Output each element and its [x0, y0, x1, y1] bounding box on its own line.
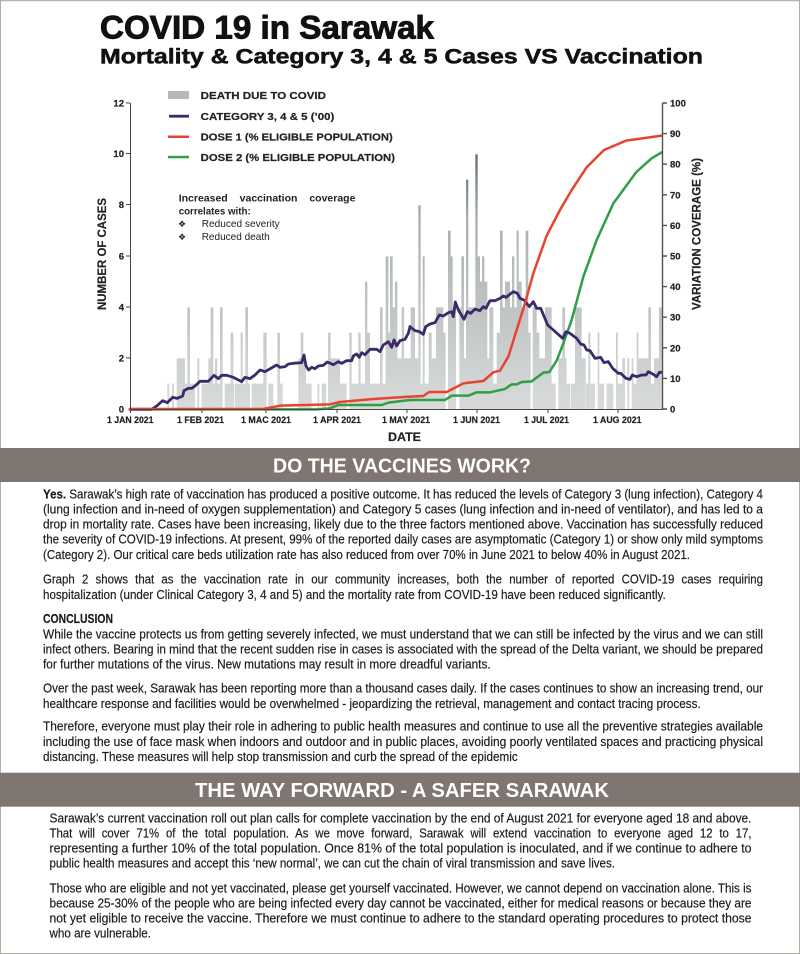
- title: COVID 19 in Sarawak: [100, 10, 434, 46]
- left axis: 8: [119, 200, 124, 211]
- line: category 3, 4 and 5: [130, 292, 662, 409]
- left axis: 0: [119, 404, 124, 416]
- y axis title: variation coverage: VARIATION COVERAGE (%): [690, 158, 704, 310]
- x axis: 1 MAY 2021: [382, 415, 431, 426]
- left axis: 4: [119, 302, 125, 314]
- right axis: 100: [670, 98, 686, 110]
- right axis: 40: [670, 282, 681, 293]
- x axis: 1 APR 2021: [313, 415, 362, 426]
- text block: yes paragraph: drop in mortality rate. Cases have been increasing, likely due to the three factors mentioned above. Vaccination has successfully reduced: [43, 518, 763, 532]
- line: dose 1: [130, 136, 662, 409]
- y axis title: number of cases: NUMBER OF CASES: [95, 198, 109, 310]
- right axis: 80: [670, 160, 681, 171]
- right axis: 70: [670, 190, 681, 201]
- left axis: 12: [113, 98, 124, 110]
- annotation: vaccination correlation: Reduced death: [202, 231, 270, 243]
- legend: DOSE 1 (% ELIGIBLE POPULATION): [201, 132, 393, 144]
- annotation: vaccination correlation: Increased vaccination coverage: [179, 192, 356, 204]
- left axis: 6: [119, 252, 124, 262]
- legend: [168, 91, 395, 164]
- text block: eligible people: because 25-30% of the people who are being infected every day cannot be vaccinated, either for medical reasons or because they are: [50, 896, 752, 910]
- x axis: [107, 409, 663, 426]
- text block: eligible people: Those who are eligible and not yet vaccinated, please get yourself vaccinated. However, we cannot depend on vaccination alone. This is: [50, 881, 752, 895]
- annotation: vaccination correlation: ❖: [178, 220, 186, 230]
- left axis: 10: [113, 149, 124, 160]
- x axis title: date: DATE: [388, 430, 421, 444]
- section heading: do the vaccines work: DO THE VACCINES WORK?: [273, 456, 531, 478]
- section heading: the way forward: THE WAY FORWARD - A SAFER SARAWAK: [195, 780, 610, 802]
- bars: death due to covid: [167, 154, 662, 409]
- text block: conclusion paragraph 2: Over the past week, Sarawak has been reporting more than a thousand cases daily. If the cases continues to show an increasing trend, our: [43, 682, 763, 696]
- text block: yes paragraph: (Category 2). Our critical care beds utilization rate has also reduced from over 70% in June 2021 to below 40% in August 2021.: [43, 548, 690, 562]
- section heading: do the vaccines work: [0, 448, 800, 482]
- text block: roll out plan: representing a further 10% of the total population. Once 81% of the total population is inoculated, and if we continue to adhere to: [50, 841, 752, 855]
- left axis: 2: [119, 354, 124, 364]
- text block: conclusion paragraph 2: [43, 682, 763, 711]
- chart: mortality, category cases and vaccination: [95, 91, 704, 444]
- section heading: the way forward: [0, 773, 800, 807]
- text block: conclusion paragraph 3: including the use of face mask when indoors and outdoor and in public places, avoiding poorly ventilated spaces and practicing physical: [43, 735, 763, 749]
- legend: DOSE 2 (% ELIGIBLE POPULATION): [201, 153, 395, 164]
- right axis: 50: [670, 252, 681, 262]
- x axis: 1 MAC 2021: [241, 415, 292, 426]
- text block: conclusion paragraph 1: [43, 628, 763, 672]
- right axis: 20: [670, 343, 681, 354]
- text block: roll out plan: Sarawak’s current vaccination roll out plan calls for complete vaccination by the end of August 2021 for everyone aged 18 and above.: [50, 811, 752, 825]
- text block: eligible people: not yet eligible to receive the vaccine. Therefore we must continue to adhere to the standard operating procedures to protect those: [50, 911, 752, 925]
- right axis: 90: [670, 129, 681, 140]
- annotation: vaccination correlation: Reduced severity: [202, 218, 280, 230]
- right axis: 60: [670, 221, 681, 232]
- left axis: [113, 98, 130, 416]
- x axis: 1 AUG 2021: [593, 415, 642, 426]
- text block: conclusion paragraph 1: While the vaccine protects us from getting severely infected, we must understand that we can still be infected by the virus and we can still: [43, 628, 763, 642]
- text block: conclusion paragraph 1: infect others. Bearing in mind that the recent sudden rise in cases is associated with the spread of the Delta variant, we should be prepared: [43, 643, 763, 657]
- text block: conclusion paragraph 3: distancing. These measures will help stop transmission and curb the spread of the epidemic: [43, 750, 518, 764]
- right axis: [662, 98, 686, 416]
- text block: yes paragraph: (lung infection and in-need of oxygen supplementation) and Category 5 cases (lung infection and in-need of ventilator), and has led to a: [43, 502, 763, 516]
- right axis: 10: [670, 374, 681, 385]
- text block: roll out plan: public health measures and accept this ‘new normal’, we can cut the chain of viral transmission and save lives.: [50, 856, 615, 870]
- x axis: 1 JAN 2021: [107, 415, 154, 426]
- text block: roll out plan: [50, 811, 752, 870]
- text block: graph 2 paragraph: [43, 573, 763, 602]
- text block: conclusion paragraph 3: Therefore, everyone must play their role in adhering to public health measures and continue to use all the preventive strategies available: [43, 720, 763, 734]
- x axis: 1 JUN 2021: [453, 415, 501, 426]
- right axis: 30: [670, 313, 681, 324]
- text block: graph 2 paragraph: hospitalization (under Clinical Category 3, 4 and 5) and the mortality rate from COVID-19 have been reduced significantly.: [43, 588, 666, 602]
- annotation: vaccination correlation: correlates with:: [179, 206, 251, 218]
- text block: conclusion paragraph 3: [43, 720, 763, 764]
- right axis: 0: [670, 404, 675, 416]
- line: dose 2: [130, 152, 662, 409]
- heading: conclusion: CONCLUSION: [43, 612, 113, 626]
- text block: eligible people: who are vulnerable.: [49, 927, 151, 941]
- text block: conclusion paragraph 2: healthcare response and facilities would be overwhelmed - jeopardizing the retrieval, management and contact tracing process.: [43, 697, 701, 711]
- x axis: 1 JUL 2021: [524, 415, 570, 426]
- text block: eligible people: [49, 881, 752, 941]
- text block: yes paragraph: [43, 487, 763, 562]
- legend: CATEGORY 3, 4 & 5 (’00): [201, 112, 334, 123]
- text block: conclusion paragraph 1: for further mutations of the virus. New mutations may result in more dreadful variants.: [43, 658, 491, 672]
- annotation: vaccination correlation: [178, 192, 356, 243]
- subtitle: Mortality & Category 3, 4 & 5 Cases VS Vaccination: [100, 46, 703, 68]
- legend: DEATH DUE TO COVID: [201, 91, 326, 102]
- annotation: vaccination correlation: ❖: [178, 233, 186, 243]
- x axis: 1 FEB 2021: [177, 415, 225, 426]
